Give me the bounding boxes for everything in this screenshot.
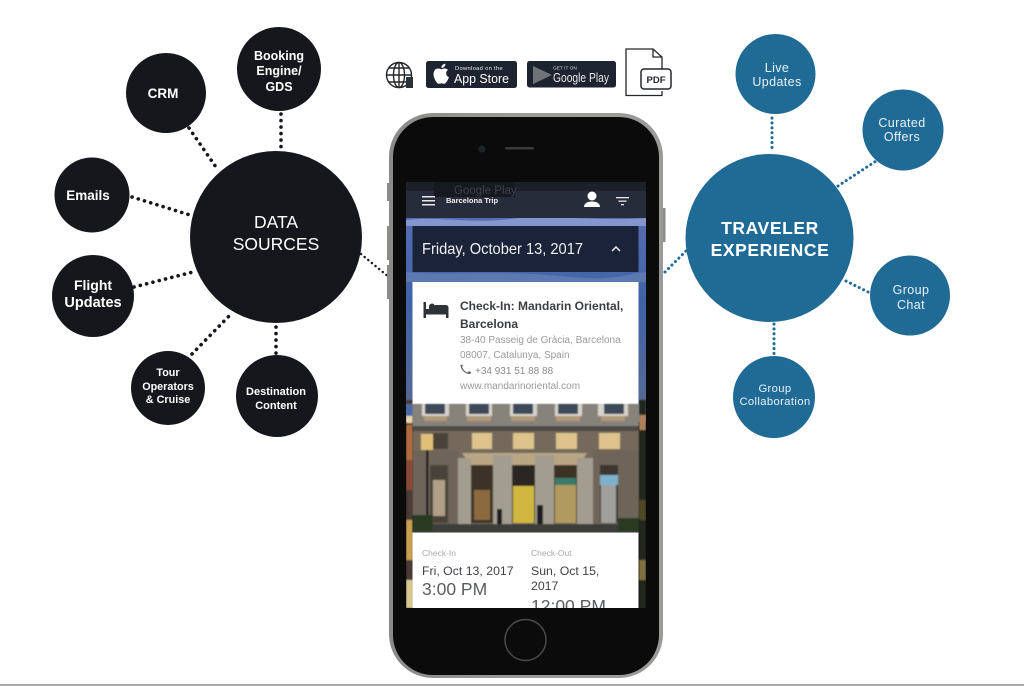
check-in and check-out details: Check-In [422,548,456,558]
node: group collaboration: Group [758,383,792,395]
check-in and check-out details: Fri, Oct 13, 2017 [422,564,514,578]
icon: bed [424,302,448,318]
badge: google play: Google Play [553,71,610,85]
node: data sources [190,151,362,323]
check-in card: 08007, Catalunya, Spain [460,350,570,361]
node: booking engine: Engine/ [256,64,302,78]
badge: google play [527,61,616,88]
check-in and check-out details: 3:00 PM [422,579,487,599]
node: group chat [870,256,950,336]
header title: Barcelona Trip [446,196,499,205]
phone screen [406,182,646,616]
node: CRM [126,53,206,133]
badge: app store [426,61,517,88]
bottom page rule [0,684,1024,686]
node: flight updates: Updates [64,295,122,311]
date bar [412,226,638,272]
panel: traveler experience hub [665,34,950,438]
node: emails [54,158,130,232]
node: booking engine: GDS [265,80,293,94]
node: group collaboration: Collaboration [739,396,811,408]
node: traveler experience: EXPERIENCE [711,240,829,260]
node: destination content [236,355,318,437]
node: booking engine [237,27,321,111]
icon: pdf file: PDF [646,75,666,86]
badge: app store: Download on the [455,66,503,72]
node: emails: Emails [66,188,110,203]
node: destination content: Content [255,400,297,412]
node: group chat: Group [893,283,929,297]
check-in and check-out details: 12:00 PM [531,596,606,616]
phone body [389,113,663,678]
screen side strips [406,400,646,610]
screen background: sky [406,218,646,422]
node: tour operators: Tour [156,367,180,379]
icon: filter [616,197,629,205]
home button [505,620,546,660]
node: curated offers: Curated [878,116,926,130]
node: traveler experience [686,154,854,322]
connector: dotted links to traveler features [665,118,876,356]
node: flight updates: Flight [74,277,112,293]
check-in and check-out details: Sun, Oct 15, [531,564,599,578]
node: group collaboration [733,356,815,438]
node: CRM: CRM [148,86,178,101]
check-in and check-out details [412,532,638,616]
check-in card: Check-In: Mandarin Oriental, [460,299,623,313]
icon row: delivery channels [386,49,671,96]
node: group chat: Chat [897,298,925,312]
node: destination content: Destination [246,386,306,398]
node: tour operators: Operators [142,381,194,393]
check-in card: www.mandarinoriental.com [459,381,580,392]
app header: Google Play [454,185,517,197]
node: live updates: Live [765,61,789,75]
check-in card: +34 931 51 88 88 [475,366,554,377]
node: tour operators [131,351,205,425]
node: tour operators: & Cruise [146,394,190,406]
check-in and check-out details: 2017 [531,579,559,593]
node: live updates: Updates [752,75,802,89]
icon: user [584,192,600,207]
phone speaker [505,147,534,150]
node: traveler experience: TRAVELER [721,218,819,238]
check-in card: 38-40 Passeig de Gràcia, Barcelona [460,335,621,346]
icon: phone [460,364,471,374]
check-in card: Barcelona [460,317,518,331]
panel: data sources hub [52,27,390,437]
node: live updates [736,34,816,114]
phone side buttons [387,183,666,299]
icon: pdf file [626,49,671,96]
app header [406,182,646,218]
hotel photo [412,404,639,533]
node: booking engine: Booking [254,49,304,63]
badge: app store: App Store [454,71,509,86]
node: data sources: DATA [254,212,298,232]
phone camera [478,146,486,152]
check-in and check-out details: Check-Out [531,548,572,558]
phone: mobile itinerary mockup [387,113,666,678]
date bar: Friday, October 13, 2017 [422,241,583,258]
icon: web globe [386,62,413,88]
node: flight updates [52,255,134,337]
node: data sources: SOURCES [233,234,319,254]
node: curated offers [862,90,944,170]
check-in card [412,282,638,404]
connector: data sources to phone [361,254,390,278]
connector: dotted links to data sources [132,114,281,355]
badge: google play: GET IT ON [553,66,577,72]
icon: menu [422,196,435,206]
node: curated offers: Offers [884,130,920,144]
